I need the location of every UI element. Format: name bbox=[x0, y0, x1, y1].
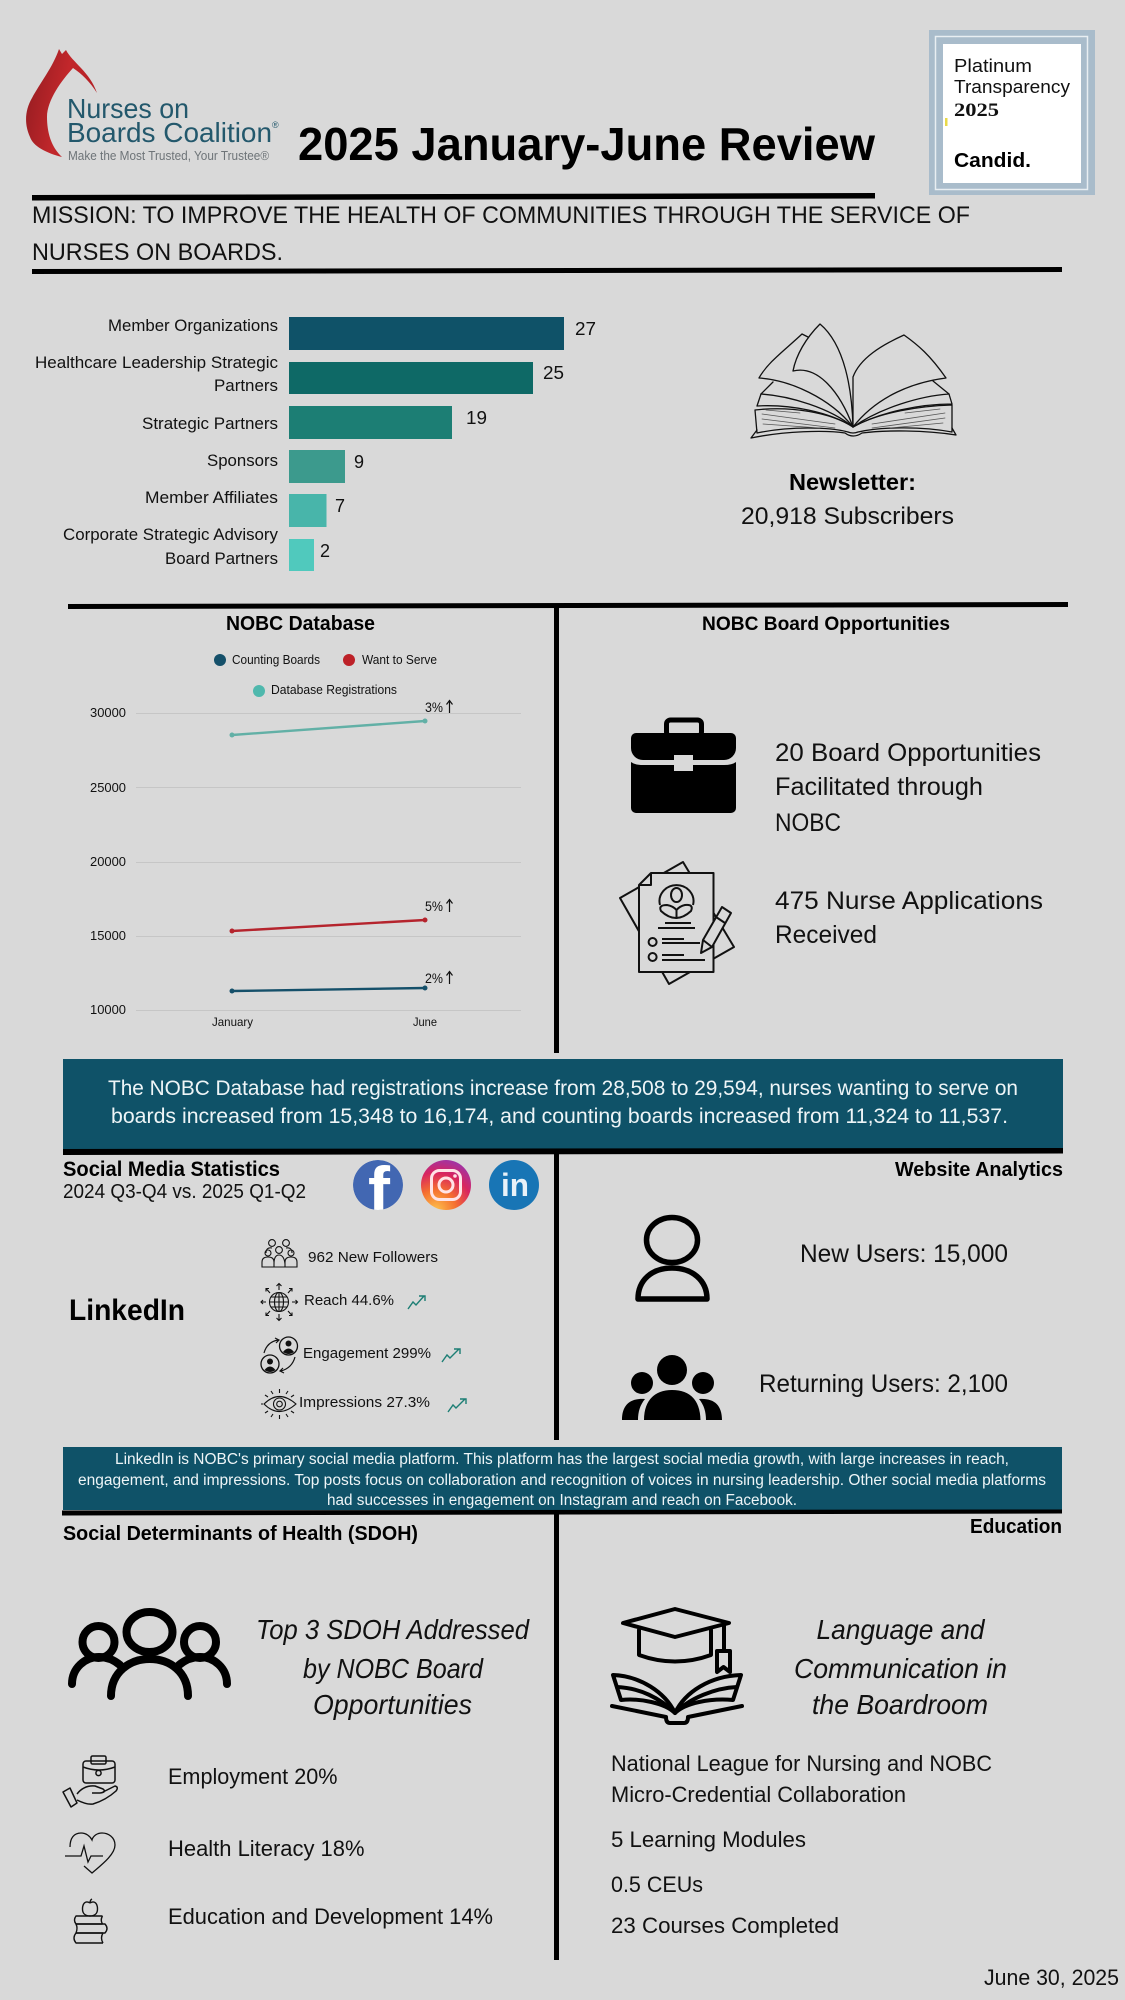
bar chart: member categories: Board Partners bbox=[165, 549, 278, 568]
icon: graduation cap and book bbox=[612, 1609, 742, 1723]
stat: impressions: Impressions 27.3% bbox=[299, 1394, 430, 1411]
text: language and communication: Language and bbox=[816, 1614, 986, 1645]
change labels: 2% bbox=[425, 971, 443, 986]
text: returning users: Returning Users: 2,100 bbox=[759, 1370, 1008, 1398]
text: board opportunities facilitated bbox=[775, 739, 1041, 837]
line chart: database: January bbox=[212, 1015, 253, 1029]
heading: Education: Education bbox=[970, 1516, 1062, 1538]
icon: single user bbox=[638, 1218, 707, 1299]
row: health literacy: Health Literacy 18% bbox=[168, 1836, 364, 1861]
badge: Platinum Transparency 2025 Candid: Transparency bbox=[954, 76, 1071, 97]
icon: briefcase bbox=[631, 720, 736, 813]
icon: trend arrow bbox=[448, 1399, 466, 1412]
badge: Platinum Transparency 2025 Candid bbox=[929, 30, 1095, 195]
text: board opportunities facilitated: NOBC bbox=[775, 809, 841, 837]
row: health literacy bbox=[65, 1833, 364, 1873]
legend bbox=[214, 653, 437, 697]
line chart: database: 10000 bbox=[90, 1002, 126, 1017]
change labels: 3% bbox=[425, 700, 443, 715]
text: education details: 5 Learning Modules bbox=[611, 1827, 806, 1852]
callout: LinkedIn summary: had successes in engagement on Instagram and reach on Facebook. bbox=[327, 1492, 797, 1509]
stat: engagement: Engagement 299% bbox=[303, 1345, 431, 1362]
series: counting boards bbox=[230, 986, 428, 994]
callout: database summary: The NOBC Database had registrations increase from 28,508 to 29,594, nurses wanting to serve on bbox=[108, 1077, 1018, 1100]
text: board opportunities facilitated: Facilitated through bbox=[775, 773, 983, 801]
series: database registrations bbox=[230, 718, 428, 738]
rule under title bbox=[32, 193, 875, 200]
callout: database summary: boards increased from 15,348 to 16,174, and counting boards increased from 11,324 to 11,537. bbox=[111, 1105, 1008, 1128]
row: education and development bbox=[74, 1899, 493, 1943]
newsletter stat: 20,918 Subscribers bbox=[741, 503, 954, 530]
text: education details: National League for Nursing and NOBC bbox=[611, 1751, 992, 1776]
badge: Platinum Transparency 2025 Candid: Platinum bbox=[954, 55, 1032, 76]
text: language and communication: Communication in bbox=[794, 1653, 1007, 1684]
vertical divider: SDOH section bbox=[554, 1514, 559, 1960]
heading: NOBC Database: NOBC Database bbox=[226, 613, 375, 635]
row: education and development: Education and Development 14% bbox=[168, 1904, 493, 1929]
heading: Website Analytics: Website Analytics bbox=[895, 1159, 1063, 1181]
bar chart: member categories: Strategic Partners bbox=[142, 414, 278, 433]
legend: Counting Boards bbox=[232, 653, 320, 667]
logo: Nurses on Boards Coalition: Boards Coalition bbox=[67, 117, 272, 148]
icon: three people outline bbox=[72, 1612, 227, 1696]
line chart: database: 15000 bbox=[90, 928, 126, 943]
stat: reach bbox=[261, 1284, 425, 1320]
logo: Nurses on Boards Coalition: Nurses on bbox=[67, 93, 189, 124]
icon: heart with pulse bbox=[65, 1833, 115, 1873]
bar chart: member categories: Corporate Strategic Advisory bbox=[63, 525, 278, 544]
icon: Instagram bbox=[421, 1160, 471, 1210]
text: education details: Micro-Credential Collaboration bbox=[611, 1782, 906, 1807]
bar chart: member categories: Member Affiliates bbox=[145, 488, 278, 507]
icon: Facebook: f bbox=[368, 1153, 391, 1227]
text: board opportunities facilitated: 20 Board Opportunities bbox=[775, 739, 1041, 767]
stat: impressions bbox=[261, 1389, 466, 1419]
stat: reach: Reach 44.6% bbox=[304, 1292, 394, 1309]
icon: red flame bbox=[26, 49, 97, 157]
text: new users: New Users: 15,000 bbox=[800, 1240, 1008, 1268]
text: language and communication: the Boardroom bbox=[812, 1689, 988, 1720]
icon: user group bbox=[622, 1355, 722, 1420]
bar chart: member categories: 7 bbox=[335, 496, 345, 516]
callout: database summary bbox=[63, 1059, 1063, 1155]
bar chart: member categories: 9 bbox=[354, 452, 364, 472]
heading: LinkedIn: LinkedIn bbox=[69, 1294, 185, 1327]
icon: trend arrow bbox=[442, 1349, 460, 1362]
bar chart: member categories: 2 bbox=[320, 541, 330, 561]
badge: Platinum Transparency 2025 Candid: Candid. bbox=[954, 150, 1031, 172]
newsletter stat bbox=[741, 469, 954, 530]
change labels bbox=[425, 700, 452, 986]
text: top 3 SDOH: Opportunities bbox=[313, 1689, 472, 1720]
icon: books with apple bbox=[74, 1899, 107, 1943]
badge: Platinum Transparency 2025 Candid: 2025 bbox=[954, 101, 999, 121]
date: June 30, 2025 bbox=[984, 1965, 1119, 1990]
bar chart: member categories: 19 bbox=[466, 408, 487, 428]
logo: Nurses on Boards Coalition: ® bbox=[272, 120, 279, 130]
vertical divider: database section bbox=[554, 606, 559, 1053]
icon: followers bbox=[262, 1240, 297, 1267]
series: want to serve bbox=[230, 918, 428, 934]
text: nurse applications bbox=[775, 887, 1043, 949]
rule under mission bbox=[32, 267, 1062, 274]
stat: engagement bbox=[261, 1337, 460, 1373]
text: top 3 SDOH: Top 3 SDOH Addressed bbox=[256, 1614, 530, 1645]
mission statement: MISSION: TO IMPROVE THE HEALTH OF COMMUNITIES THROUGH THE SERVICE OF bbox=[32, 202, 970, 229]
callout: LinkedIn summary: LinkedIn is NOBC's primary social media platform. This platform has the largest social media growth, with large increases in reach, bbox=[115, 1451, 1009, 1468]
line chart: database: 30000 bbox=[90, 705, 126, 720]
line chart: database bbox=[90, 653, 521, 1029]
icon: open book bbox=[751, 324, 956, 438]
icon: engagement people bbox=[261, 1337, 298, 1373]
text: nurse applications: 475 Nurse Applications bbox=[775, 887, 1043, 915]
stat: new followers bbox=[262, 1240, 438, 1267]
bar chart: member categories: Member Organizations bbox=[108, 316, 278, 335]
icon: LinkedIn bbox=[489, 1160, 539, 1210]
text: top 3 SDOH: by NOBC Board bbox=[303, 1653, 484, 1684]
icon: trend arrow bbox=[408, 1296, 425, 1309]
icon: eye bbox=[261, 1389, 296, 1419]
bar chart: member categories: 27 bbox=[575, 319, 596, 339]
bar chart: member categories: Sponsors bbox=[207, 451, 278, 470]
vertical divider: social section bbox=[554, 1154, 559, 1440]
text: education details: 0.5 CEUs bbox=[611, 1872, 703, 1897]
text: language and communication bbox=[794, 1614, 1007, 1720]
bar chart: member categories bbox=[35, 316, 596, 571]
heading: Social Media Statistics: 2024 Q3-Q4 vs. 2025 Q1-Q2 bbox=[63, 1181, 306, 1203]
text: top 3 SDOH bbox=[256, 1614, 530, 1720]
heading: NOBC Board Opportunities: NOBC Board Opportunities bbox=[702, 613, 950, 635]
icon: Facebook bbox=[353, 1160, 403, 1210]
newsletter stat: Newsletter: bbox=[789, 469, 916, 495]
line chart: database: June bbox=[413, 1015, 437, 1029]
line chart: database: 20000 bbox=[90, 854, 126, 869]
stat: new followers: 962 New Followers bbox=[308, 1249, 438, 1266]
change labels: 5% bbox=[425, 899, 443, 914]
mission statement: NURSES ON BOARDS. bbox=[32, 239, 283, 266]
logo: Nurses on Boards Coalition bbox=[26, 49, 279, 163]
rule above database section bbox=[68, 602, 1068, 609]
mission statement bbox=[32, 202, 970, 266]
icon: LinkedIn: in bbox=[501, 1167, 529, 1203]
callout: LinkedIn summary bbox=[62, 1447, 1062, 1516]
bar chart: member categories: Partners bbox=[214, 376, 278, 395]
text: nurse applications: Received bbox=[775, 921, 877, 949]
callout: LinkedIn summary: engagement, and impressions. Top posts focus on collaboration and recognition of voices in nursing leadership. Other social media platforms bbox=[78, 1472, 1046, 1489]
icon: application documents with pen bbox=[620, 862, 734, 984]
legend: Want to Serve bbox=[362, 653, 437, 667]
line chart: database: 25000 bbox=[90, 780, 126, 795]
icon: hand holding briefcase bbox=[63, 1756, 117, 1807]
heading: Social Media Statistics bbox=[63, 1158, 306, 1203]
row: employment bbox=[63, 1756, 338, 1807]
heading: Social Determinants of Health: Social Determinants of Health (SDOH) bbox=[63, 1523, 418, 1545]
icon: globe with arrows bbox=[261, 1284, 298, 1320]
legend: Database Registrations bbox=[271, 683, 397, 697]
row: employment: Employment 20% bbox=[168, 1764, 338, 1789]
bar chart: member categories: Healthcare Leadership Strategic bbox=[35, 353, 278, 372]
logo: Nurses on Boards Coalition: Make the Most Trusted, Your Trustee® bbox=[68, 149, 270, 163]
bar chart: member categories: 25 bbox=[543, 363, 564, 383]
text: education details bbox=[611, 1751, 992, 1938]
heading: Social Media Statistics: Social Media Statistics bbox=[63, 1158, 280, 1181]
title: 2025 January-June Review bbox=[298, 118, 875, 170]
text: education details: 23 Courses Completed bbox=[611, 1913, 839, 1938]
